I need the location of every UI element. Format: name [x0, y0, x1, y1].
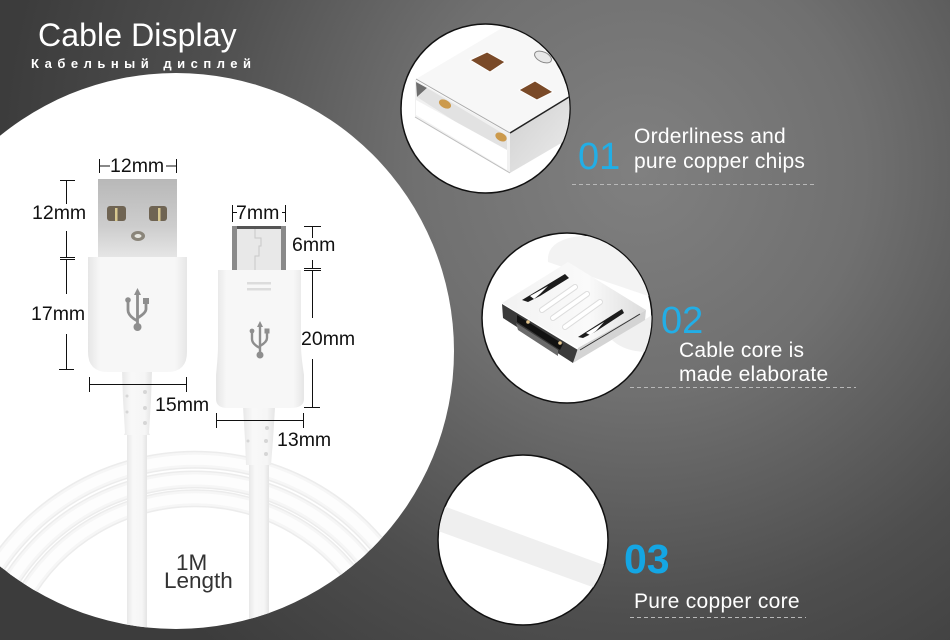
detail circle 03 — [430, 455, 620, 625]
usb icon a — [125, 288, 149, 331]
label 02: Cable core is — [679, 339, 804, 362]
micro plug body — [216, 270, 304, 408]
micro cable — [243, 407, 275, 630]
usb icon b — [250, 321, 270, 358]
label 01: pure copper chips — [634, 150, 805, 173]
dimension labels: 6mm — [292, 234, 335, 256]
dimension labels: 12mm — [32, 202, 86, 224]
label 02 — [630, 300, 856, 388]
dimension labels — [31, 155, 355, 451]
label 03 — [624, 536, 806, 618]
label 01 — [572, 125, 814, 184]
dimension labels: 12mm — [110, 155, 164, 177]
micro ridges — [247, 282, 271, 290]
detail circle 01 — [401, 24, 572, 193]
label 02: 02 — [661, 300, 703, 342]
usb-a cable — [122, 370, 152, 630]
latch holes — [522, 274, 569, 302]
micro closeup — [502, 272, 646, 338]
length label: Length — [164, 568, 233, 593]
dimension labels: 20mm — [301, 328, 355, 350]
subtitle: Кабельный дисплей — [31, 56, 257, 71]
label 01: 01 — [578, 136, 620, 178]
usb-a metal shell — [98, 179, 177, 258]
detail circle 02 — [482, 233, 660, 403]
label 03: 03 — [624, 536, 670, 582]
usb-a connector — [88, 179, 187, 630]
usb-a closeup body — [508, 28, 569, 100]
usb-a plug body — [88, 257, 187, 372]
background cable shape — [548, 236, 649, 296]
contact points — [526, 320, 530, 324]
cable coil — [0, 460, 412, 600]
cable closeup — [439, 506, 604, 588]
micro-usb connector — [216, 226, 304, 630]
dimension labels: 17mm — [31, 303, 85, 325]
micro metal tip — [232, 226, 286, 272]
length label — [164, 550, 233, 593]
copper contacts — [470, 52, 505, 72]
dimension labels: 13mm — [277, 429, 331, 451]
dimension lines — [59, 159, 321, 428]
ridges — [542, 287, 600, 327]
large white circle panel — [0, 73, 454, 629]
label 03: Pure copper core — [634, 590, 800, 613]
label 01: Orderliness and — [634, 125, 786, 148]
label 02: made elaborate — [679, 363, 828, 386]
dimension labels: 7mm — [236, 202, 279, 224]
dimension labels: 15mm — [155, 394, 209, 416]
title: Cable Display — [38, 17, 237, 53]
usb-a contact holes — [107, 206, 167, 241]
length label: 1M — [176, 550, 207, 575]
